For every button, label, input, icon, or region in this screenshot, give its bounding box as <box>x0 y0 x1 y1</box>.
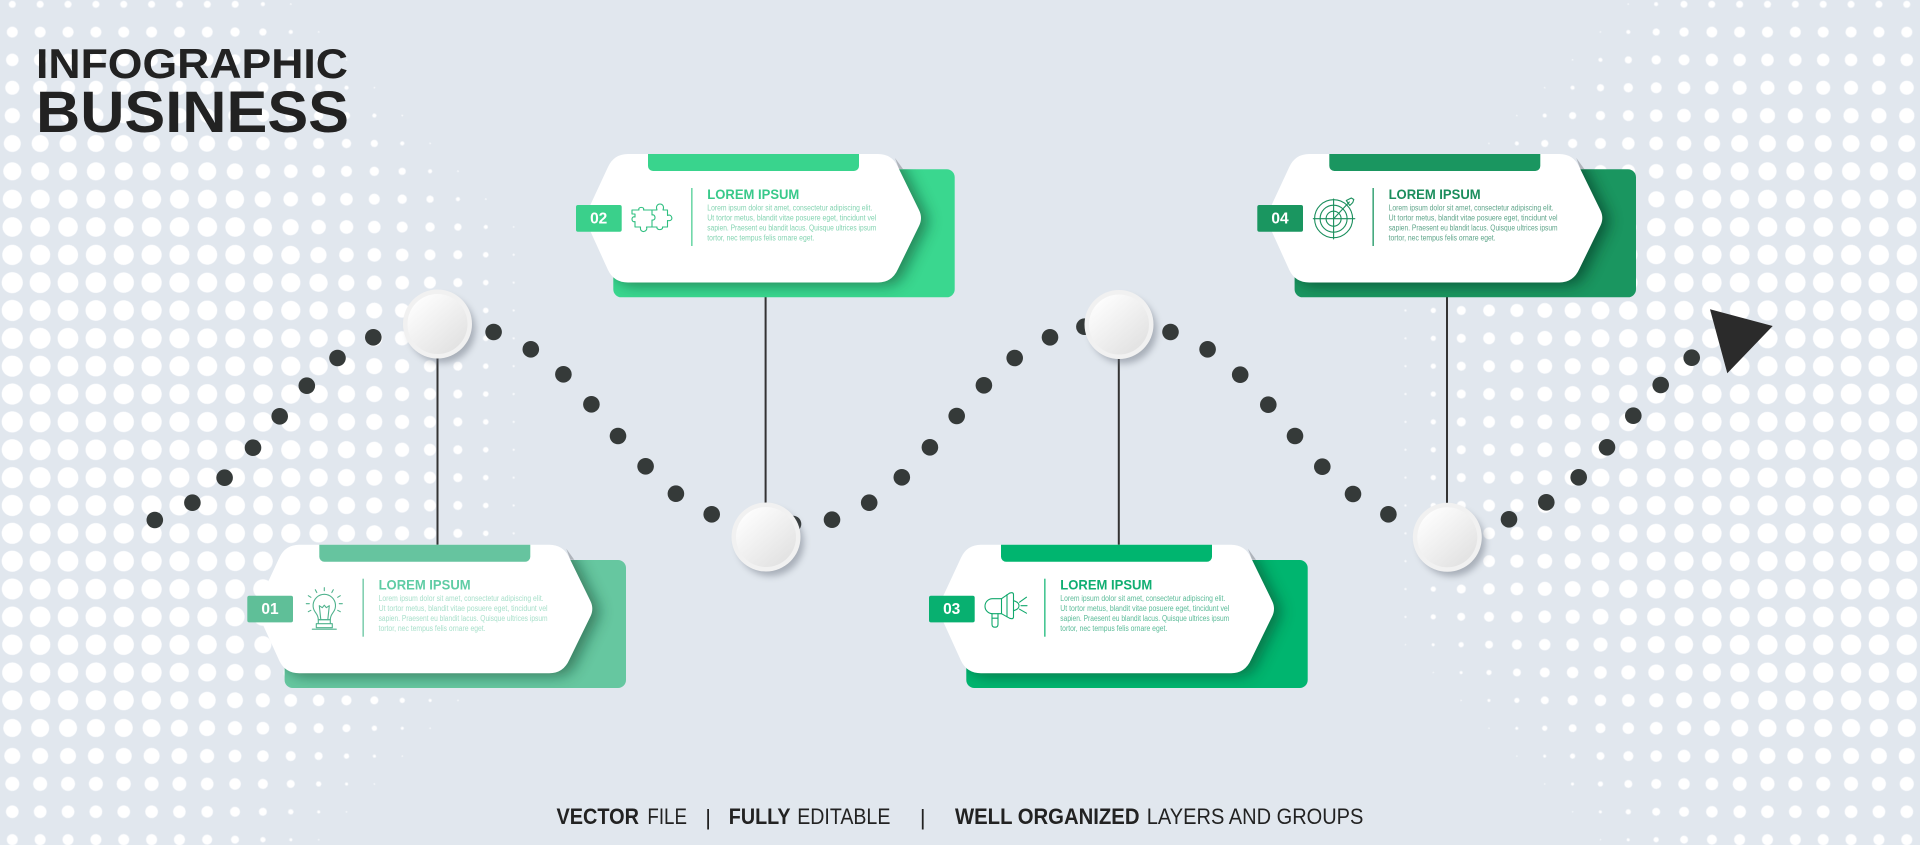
heading: LOREM IPSUM <box>1389 186 1481 202</box>
number badge 01: 01 <box>261 601 279 618</box>
footer tagline <box>556 804 1363 830</box>
divider <box>691 188 692 246</box>
top bar <box>319 545 530 562</box>
body text: Ut tortor metus, blandit vitae posuere eget, tincidunt vel <box>1389 214 1558 222</box>
body text: Lorem ipsum dolor sit amet, consectetur adipiscing elit. <box>707 204 872 212</box>
body text: sapien. Praesent eu blandit lacus. Quisque ultrices ipsum <box>1389 224 1558 232</box>
divider <box>362 579 364 637</box>
title: BUSINESS <box>36 80 349 145</box>
panel: step 01 <box>247 545 626 688</box>
body text: Ut tortor metus, blandit vitae posuere eget, tincidunt vel <box>379 604 548 613</box>
footer tagline: WELL ORGANIZED <box>955 804 1140 829</box>
footer tagline: EDITABLE <box>797 804 890 829</box>
footer tagline: FILE <box>647 804 687 829</box>
divider <box>1044 579 1046 637</box>
title <box>36 40 349 145</box>
footer tagline: FULLY <box>729 804 791 829</box>
body text <box>707 204 877 242</box>
number badge 04: 04 <box>1271 210 1289 228</box>
heading: LOREM IPSUM <box>379 577 471 593</box>
heading: LOREM IPSUM <box>707 186 799 202</box>
body text: Lorem ipsum dolor sit amet, consectetur adipiscing elit. <box>1389 204 1554 212</box>
body text: tortor, nec tempus felis ornare eget. <box>1060 624 1167 633</box>
body text: Lorem ipsum dolor sit amet, consectetur adipiscing elit. <box>379 594 544 603</box>
body text: tortor, nec tempus felis ornare eget. <box>1389 234 1496 242</box>
number badge 03 <box>929 596 975 622</box>
panel: step 04 <box>1257 154 1636 297</box>
connector line 2 <box>765 297 767 505</box>
node 1 <box>403 290 476 363</box>
number badge 01 <box>247 596 293 622</box>
number badge 02 <box>576 205 622 232</box>
number badge 03: 03 <box>943 601 961 618</box>
title: INFOGRAPHIC <box>36 40 348 87</box>
body text: sapien. Praesent eu blandit lacus. Quisque ultrices ipsum <box>707 224 876 232</box>
body text: sapien. Praesent eu blandit lacus. Quisque ultrices ipsum <box>1060 614 1229 623</box>
top bar <box>1001 545 1212 562</box>
icon: puzzle <box>632 204 672 232</box>
connector line 3 <box>1118 355 1120 546</box>
arrow head <box>1710 309 1773 373</box>
panel: step 03 <box>929 545 1308 688</box>
connector line 1 <box>436 355 438 546</box>
node 3 <box>1084 290 1157 364</box>
body text <box>1389 204 1558 242</box>
panel: step 02 <box>576 154 955 297</box>
icon: light bulb <box>306 588 342 629</box>
icon: target <box>1313 198 1355 239</box>
number badge 04 <box>1257 205 1303 232</box>
icon: megaphone <box>985 593 1027 627</box>
body text <box>1060 594 1230 633</box>
node 4 <box>1413 503 1485 576</box>
body text <box>379 594 548 633</box>
body text: sapien. Praesent eu blandit lacus. Quisque ultrices ipsum <box>379 614 548 623</box>
divider <box>1372 188 1374 246</box>
body text: tortor, nec tempus felis ornare eget. <box>707 234 814 242</box>
footer tagline: | <box>920 805 926 830</box>
body text: Lorem ipsum dolor sit amet, consectetur adipiscing elit. <box>1060 594 1225 603</box>
footer tagline: LAYERS AND GROUPS <box>1147 804 1363 829</box>
node 2 <box>732 502 804 576</box>
number badge 02: 02 <box>590 210 607 228</box>
heading: LOREM IPSUM <box>1060 577 1152 593</box>
connector line 4 <box>1446 297 1448 505</box>
top bar <box>648 154 859 171</box>
body text: Ut tortor metus, blandit vitae posuere eget, tincidunt vel <box>1060 604 1230 613</box>
footer tagline: | <box>705 805 711 830</box>
footer tagline: VECTOR <box>556 804 639 829</box>
body text: Ut tortor metus, blandit vitae posuere eget, tincidunt vel <box>707 214 877 222</box>
body text: tortor, nec tempus felis ornare eget. <box>379 624 486 633</box>
dotted path with arrow <box>146 309 1773 532</box>
top bar <box>1329 154 1540 171</box>
